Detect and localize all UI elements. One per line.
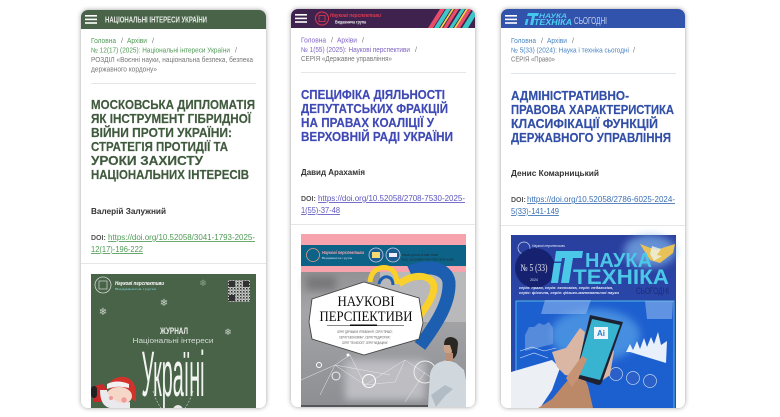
DOI link: https://doi.org/10.52058/3041-1793-2025- (108, 232, 255, 242)
article title (511, 88, 674, 145)
breadcrumbs: / (541, 38, 543, 45)
DOI link: 12(17)-196-222 (91, 244, 143, 254)
article title: НА ПРАВАХ КОАЛІЦІЇ У (301, 115, 435, 130)
author: Давид Арахамія (301, 167, 365, 177)
panel: article card science and technology (501, 9, 685, 417)
breadcrumbs (301, 36, 417, 63)
title plate: СЕРІЯ "ДЕРЖАВНЕ УПРАВЛІННЯ", СЕРІЯ "ПРАВО", (337, 330, 393, 334)
breadcrumbs: Архіви (127, 37, 147, 45)
author: Денис Комарницький (511, 168, 599, 178)
journal cover: science and technology: Наукові перспективи (532, 244, 565, 248)
header bar: Наукові перспективи (330, 13, 382, 19)
journal cover: national interests: ❄ (224, 327, 232, 337)
heart in national colours (370, 268, 449, 346)
article title: СПЕЦИФІКА ДІЯЛЬНОСТІ (301, 87, 445, 102)
title plate: НАУКОВІ (338, 294, 394, 310)
man in shirt (428, 337, 466, 407)
DOI link (511, 194, 675, 216)
breadcrumbs: РОЗДІЛ «Воєнні науки, національна безпека, безпека (91, 56, 253, 64)
header bar: НАЦІОНАЛЬНІ ІНТЕРЕСИ УКРАЇНИ (105, 14, 207, 24)
article title: КЛАСИФІКАЦІЇ ФУНКЦІЙ (511, 116, 658, 131)
journal cover: national interests: Наукові перспективи (115, 281, 164, 287)
journal cover: scientific perspectives: Наукові перспективи (322, 250, 364, 255)
journal cover: scientific perspectives (301, 234, 466, 407)
network photo background (301, 272, 466, 407)
article title: ДЕРЖАВНОГО УПРАВЛІННЯ (511, 130, 671, 145)
journal cover: national interests: ❄ (99, 307, 107, 318)
breadcrumbs: Головна (301, 38, 326, 44)
author: Валерій Залужний (91, 206, 166, 216)
Santa illustration (91, 377, 136, 408)
cover masthead: ТЕХНІКА (573, 266, 669, 289)
issue badge: 2024 (530, 278, 538, 282)
DOI link (91, 232, 255, 254)
DOI link: DOI: (301, 196, 316, 203)
journal cover: science and technology: серія: право, серія: економіка, серія: педагогіка, (519, 286, 613, 290)
title plate: ПЕРСПЕКТИВИ (320, 309, 413, 325)
article title: АДМІНІСТРАТИВНО- (511, 88, 629, 103)
journal cover: national interests: Національні інтереси (132, 336, 214, 345)
article title: МОСКОВСЬКА ДИПЛОМАТІЯ (91, 97, 255, 112)
article title: НАЦІОНАЛЬНИХ ІНТЕРЕСІВ (91, 167, 249, 182)
title plate: СЕРІЯ "ТЕХНОЛОГІЇ", СЕРІЯ "МЕДИЦИНА" (342, 341, 388, 345)
journal cover: science and technology: серія: фізична, серія: фізико-математичні науки (519, 291, 620, 295)
article title: ВІЙНИ ПРОТИ УКРАЇНИ: (91, 125, 232, 140)
header bar (291, 9, 476, 28)
DOI link (301, 193, 465, 215)
breadcrumbs: / (362, 38, 364, 44)
journal cover: national interests: ❄ (160, 298, 168, 309)
article title: ПРАВОВА ХАРАКТЕРИСТИКА (511, 102, 674, 117)
article title: ЯК ІНСТРУМЕНТ ГІБРИДНОЇ (91, 111, 251, 126)
breadcrumbs: Архіви (547, 37, 567, 45)
breadcrumbs (511, 37, 635, 64)
AI phone illustration: Ai (597, 329, 605, 338)
DOI link: DOI: (511, 197, 526, 204)
breadcrumbs: Головна (511, 38, 536, 45)
breadcrumbs: / (152, 38, 154, 45)
DOI link: https://doi.org/10.52058/2786-6025-2024- (527, 194, 675, 204)
breadcrumbs: державного кордону» (91, 66, 157, 74)
breadcrumbs: Головна (91, 38, 116, 45)
issue badge: № 5 (33) (520, 263, 548, 274)
DOI link: 1(55)-37-48 (301, 205, 340, 215)
cover masthead (551, 250, 669, 297)
breadcrumbs: СЕРІЯ «Державне управління» (301, 55, 392, 63)
article title: ВЕРХОВНІЙ РАДІ УКРАЇНИ (301, 129, 453, 144)
cover masthead: СЬОГОДНІ (636, 286, 669, 297)
header bar: ТЕХНІКА (534, 18, 572, 27)
issue badge (515, 248, 555, 288)
title plate: СЕРІЯ "ЕКОНОМІКА", СЕРІЯ "ПЕДАГОГІКА", (339, 336, 391, 340)
breadcrumbs: / (331, 38, 333, 44)
journal cover: national interests: ❄ (199, 278, 207, 288)
breadcrumbs: / (235, 48, 237, 54)
AI phone illustration (511, 300, 674, 417)
breadcrumbs: Архіви (337, 36, 357, 44)
breadcrumbs: / (572, 38, 574, 45)
header bar: Видавнича група (335, 20, 366, 24)
title plate (309, 282, 423, 355)
journal cover: national interests: Україні (142, 338, 204, 410)
journal cover: scientific perspectives: Видавнича група (322, 256, 353, 260)
DOI link: 5(33)-141-149 (511, 206, 559, 216)
article title: УРОКИ ЗАХИСТУ (91, 153, 204, 168)
panel: article card scientific perspectives (291, 9, 476, 407)
breadcrumbs: / (415, 47, 417, 54)
breadcrumbs: № 5(33) (2024): Наука і техніка сьогодні (511, 46, 629, 54)
breadcrumbs: / (121, 38, 123, 45)
breadcrumbs: № 12(17) (2025): Національні інтереси України (91, 46, 230, 54)
breadcrumbs (91, 37, 253, 74)
header bar: СЬОГОДНІ (574, 16, 607, 27)
journal cover: national interests: ЖУРНАЛ (159, 326, 188, 337)
DOI link: DOI: (91, 235, 106, 242)
header bar (81, 10, 266, 29)
header bar (501, 9, 685, 28)
article title (301, 87, 453, 144)
journal cover: scientific perspectives: DOI: 10.52058/2708-7530-2025-1(55) (402, 258, 454, 262)
header bar: НАУКА (539, 13, 567, 20)
journal cover: science and technology (511, 235, 676, 417)
article title (91, 97, 255, 182)
glowing dove emblem (624, 235, 676, 267)
breadcrumbs: № 1(55) (2025): Наукові перспективи (301, 46, 410, 54)
article title: СТРАТЕГІЯ ПРОТИДІЇ ТА (91, 139, 228, 154)
panel: article card national interests (81, 10, 266, 415)
breadcrumbs: СЕРІЯ «Право» (511, 56, 555, 64)
article title: ДЕПУТАТСЬКИХ ФРАКЦІЙ (301, 101, 448, 116)
cover masthead: НАУКА (585, 250, 652, 272)
journal cover: scientific perspectives: ISSN (print) 2708-7530 (402, 253, 439, 257)
DOI link: https://doi.org/10.52058/2708-7530-2025- (318, 193, 465, 203)
journal cover: national interests: Видавнича група (115, 287, 157, 291)
journal cover: national interests (91, 274, 256, 415)
breadcrumbs: / (633, 48, 635, 54)
